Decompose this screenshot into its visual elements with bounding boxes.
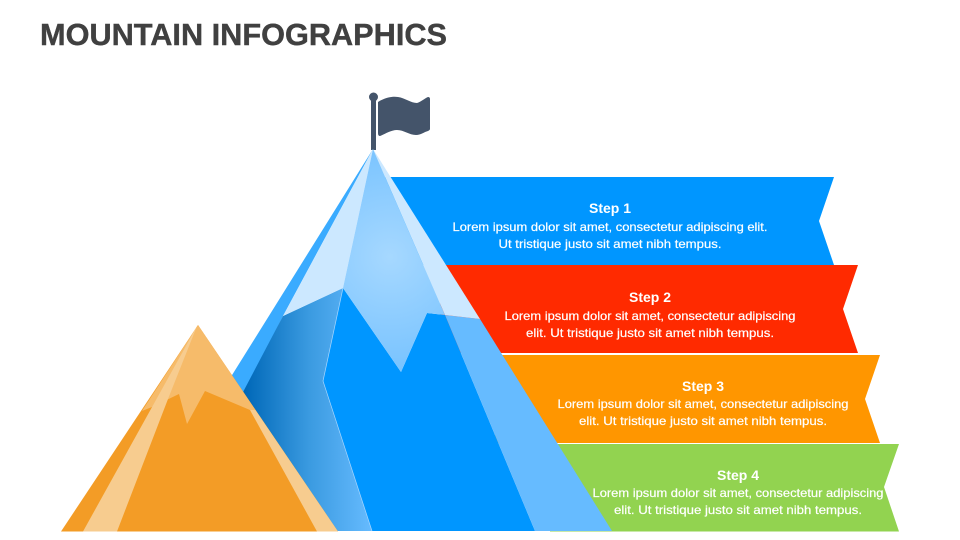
banner: step 4 xyxy=(550,444,899,532)
step 1 text line 2: Ut tristique justo sit amet nibh tempus. xyxy=(498,237,722,251)
right pale band xyxy=(250,410,338,532)
ridge highlight xyxy=(323,288,372,531)
step 3 heading: Step 3 xyxy=(682,378,724,394)
back face xyxy=(204,149,373,420)
orange snow cap xyxy=(142,325,256,424)
step 4 heading: Step 4 xyxy=(717,467,759,483)
right light face xyxy=(445,315,612,531)
main front face xyxy=(323,288,535,531)
step 1 heading: Step 1 xyxy=(589,200,631,216)
step 2 text: Lorem ipsum dolor sit amet, consectetur adipiscing xyxy=(504,309,796,323)
large blue mountain xyxy=(170,149,612,531)
banner: step 1 xyxy=(380,177,834,265)
small orange mountain xyxy=(61,325,338,532)
step 4 text line 2: elit. Ut tristique justo sit amet nibh tempus. xyxy=(614,503,862,517)
pale right snow xyxy=(373,149,480,319)
step 2 heading: Step 2 xyxy=(629,289,671,305)
left shaded face xyxy=(170,288,372,531)
icon: flag xyxy=(369,92,430,150)
orange body xyxy=(61,325,338,532)
step 3 text: Lorem ipsum dolor sit amet, consectetur adipiscing xyxy=(558,397,848,411)
central snow cap xyxy=(343,149,445,372)
left pale band xyxy=(83,326,197,532)
step 4 text: Lorem ipsum dolor sit amet, consectetur adipiscing xyxy=(592,486,884,500)
banner: step 3 xyxy=(495,355,880,443)
step 1 text: Lorem ipsum dolor sit amet, consectetur adipiscing elit. xyxy=(452,220,768,234)
title: MOUNTAIN INFOGRAPHICS xyxy=(40,18,447,52)
banner: step 2 xyxy=(440,265,858,353)
step 3 text line 2: elit. Ut tristique justo sit amet nibh tempus. xyxy=(579,414,827,428)
pale left snow xyxy=(283,149,373,316)
step 2 text line 2: elit. Ut tristique justo sit amet nibh tempus. xyxy=(526,326,774,340)
